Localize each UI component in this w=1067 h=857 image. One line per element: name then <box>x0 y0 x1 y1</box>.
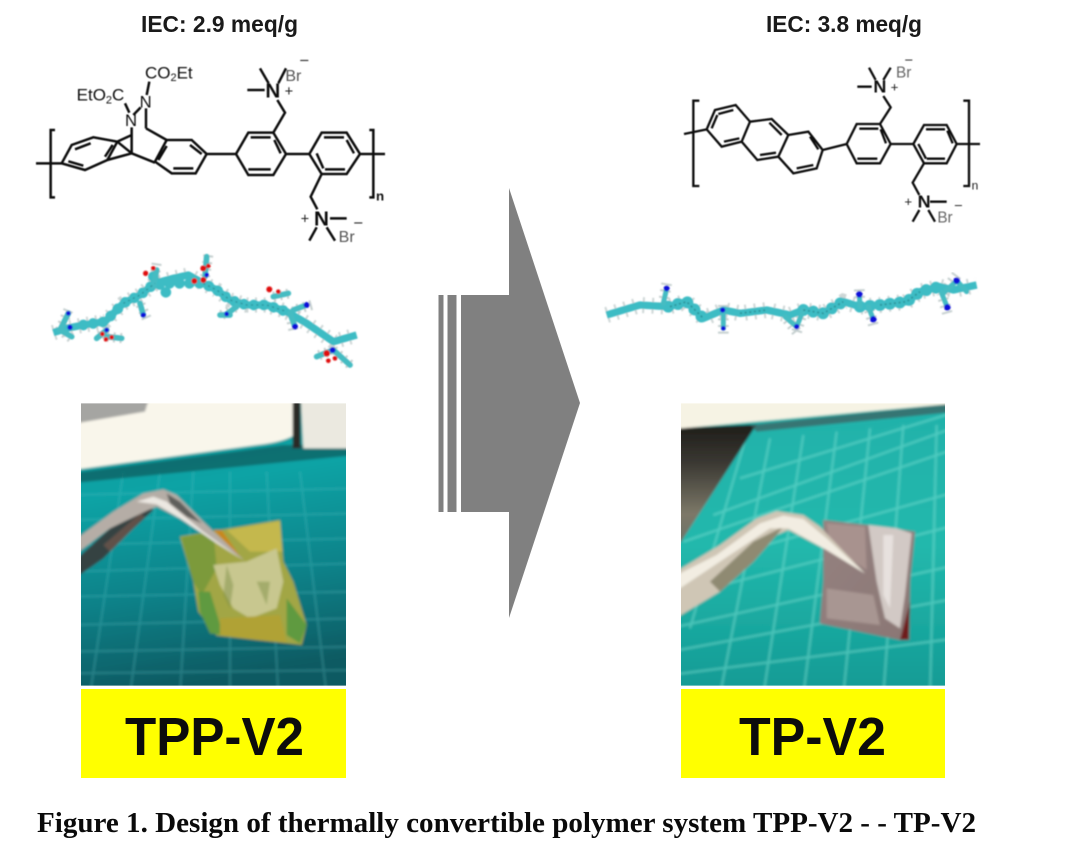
label box: TP-V2: TP-V2 <box>739 707 886 767</box>
label: EtO2C: EtO <box>77 86 106 105</box>
chemical structure: TP-V2 <box>684 53 980 227</box>
label: lower bromide charge: − <box>353 214 363 233</box>
label: upper plus charge: + <box>891 79 899 94</box>
label: upper bromide charge: − <box>299 51 309 70</box>
label: lower bromide: Br <box>937 210 953 227</box>
label: lower plus charge: + <box>301 211 309 227</box>
arrow: thermal conversion <box>438 188 580 618</box>
label: CO2Et: Et <box>177 63 193 82</box>
oxygen atoms <box>100 264 337 363</box>
label: CO2Et: CO <box>145 63 170 82</box>
3D molecular model: TPP-V2 <box>53 255 357 366</box>
label: upper ammonium N: N <box>873 77 886 97</box>
nitrogen atoms <box>664 277 960 331</box>
label box: TPP-V2: TPP-V2 <box>125 707 304 767</box>
photo: TP-V2 film held by tweezers <box>681 403 945 686</box>
label: upper plus charge: + <box>285 84 293 100</box>
label: upper bromide charge: − <box>904 53 913 69</box>
label: repeat n: n <box>376 189 384 204</box>
label: lower bromide charge: − <box>954 199 963 215</box>
figure caption: Figure 1. Design of thermally convertible polymer system TPP-V2 - - TP-V2 <box>37 808 976 839</box>
label: bridge nitrogen lower: N <box>125 111 137 130</box>
label: upper bromide: Br <box>285 68 302 85</box>
label: upper ammonium N: N <box>265 79 280 102</box>
label: repeat n: n <box>972 178 978 192</box>
label: lower ammonium N: N <box>918 192 931 212</box>
label: upper bromide: Br <box>896 64 911 81</box>
label: lower ammonium N: N <box>314 207 329 230</box>
label: lower plus charge: + <box>904 194 912 209</box>
heading: IEC of TP-V2: IEC: 3.8 meq/g <box>766 11 922 37</box>
photo: TPP-V2 film held by tweezers <box>81 403 346 686</box>
label: EtO2C: C <box>112 86 124 105</box>
label: CO2Et: 2 <box>170 72 177 84</box>
label box: TPP-V2 <box>81 689 346 778</box>
label: lower bromide: Br <box>339 229 355 246</box>
heading: IEC of TPP-V2: IEC: 2.9 meq/g <box>141 11 298 37</box>
chemical structure: TPP-V2 <box>36 51 385 246</box>
nitrogen atoms <box>66 273 336 353</box>
label: bridge nitrogen upper: N <box>140 92 152 111</box>
label: EtO2C: 2 <box>106 94 112 106</box>
label box: TP-V2 <box>681 689 945 778</box>
3D molecular model: TP-V2 <box>607 275 977 335</box>
